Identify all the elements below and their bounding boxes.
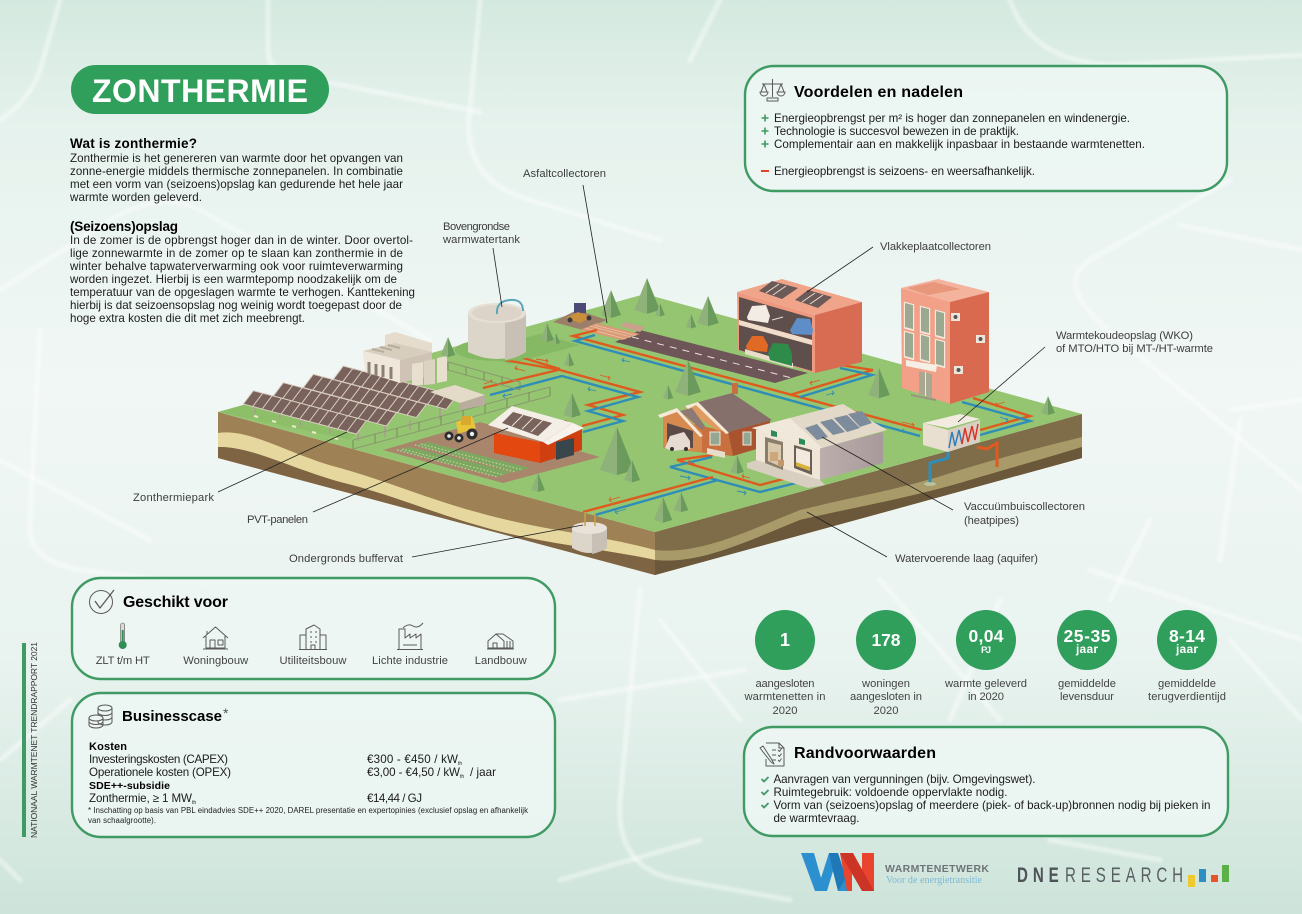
icon: thermometer (119, 623, 127, 649)
farm field (383, 422, 600, 483)
panel: randvoorwaarden: Vorm van (seizoens)opslag of meerdere (piek- of back-up)bronnen nodig bij pieken in (774, 799, 1210, 812)
icon: factory (397, 623, 423, 650)
stat: levensduur: 25-35 (1064, 626, 1111, 646)
panel: geschikt voor: ZLT t/m HT (96, 655, 150, 667)
panel: businesscase: * (223, 705, 229, 721)
diagram labels: Bovengrondse (443, 221, 510, 233)
platform side faces (218, 412, 1082, 575)
barn with PVT panels (488, 406, 584, 463)
stat: warmtenetten: warmtenetten in (744, 691, 826, 703)
panel: businesscase: / jaar (470, 766, 496, 779)
panel: businesscase: Operationele kosten (OPEX) (89, 766, 231, 779)
panel: geschikt voor: Landbouw (475, 655, 528, 667)
stat: levensduur: gemiddelde (1058, 678, 1116, 690)
house (658, 383, 772, 458)
text block: wat is zonthermie: warmte worden geleverd. (69, 191, 202, 204)
stat: warmte geleverd: warmte geleverd (944, 678, 1027, 690)
warm water tank (455, 300, 539, 361)
stat: terugverdientijd (1148, 610, 1226, 703)
callout lines (218, 185, 1045, 557)
diagram labels: Watervoerende laag (aquifer) (895, 553, 1038, 565)
panel: businesscase: SDE++-subsidie (89, 780, 170, 792)
panel: businesscase: Investeringskosten (CAPEX) (89, 753, 228, 766)
warehouse with vacuum tube collectors (747, 404, 887, 488)
panel: businesscase: th (192, 800, 196, 806)
text block: wat is zonthermie: zonne-energie middels thermische zonnepanelen. In combinatie (70, 165, 403, 178)
diagram labels: Zonthermiepark (133, 492, 214, 504)
panel: geschikt voor: Utiliteitsbouw (280, 655, 347, 667)
panel: randvoorwaarden: Randvoorwaarden (794, 745, 936, 762)
text block: seizoensopslag: temperatuur van de opgeslagen warmte te verhogen. Kanttekening (70, 286, 415, 299)
panel: voordelen en nadelen: Energieopbrengst per m² is hoger dan zonnepanelen en windenergie. (774, 112, 1130, 125)
text block: wat is zonthermie: Wat is zonthermie? (70, 136, 197, 151)
logo: warmtenetwerk (801, 853, 989, 891)
icon: checklist (760, 743, 784, 766)
solar field (zonthermiepark) (243, 366, 456, 441)
stat: warmtenetten (744, 610, 826, 717)
stat: warmte geleverd: PJ (981, 645, 991, 656)
logo: dne research (1017, 862, 1229, 887)
stat: terugverdientijd: gemiddelde (1158, 678, 1216, 690)
panel: geschikt voor: Geschikt voor (123, 594, 228, 611)
factory building (363, 332, 485, 410)
stat: terugverdientijd: 8-14 (1169, 626, 1205, 646)
diagram labels: warmwatertank (442, 234, 520, 246)
stat: woningen: 2020 (874, 705, 898, 717)
asphalt machine (566, 303, 592, 323)
text block: seizoensopslag: hoge extra kosten die dit met zich meebrengt. (70, 312, 305, 325)
underground buffer tank (572, 512, 607, 554)
stat: terugverdientijd: jaar (1175, 642, 1198, 656)
panel: businesscase: * Inschatting op basis van PBL eindadvies SDE++ 2020, DAREL presentatie en expertopinies (exclusief opslag en afhankelijk (88, 806, 528, 815)
WKO unit with heat exchanger (923, 414, 980, 452)
panel: voordelen en nadelen (745, 66, 1227, 191)
panel: randvoorwaarden: Aanvragen van vergunningen (bijv. Omgevingswet). (774, 773, 1036, 786)
text block: seizoensopslag: hierbij is dat seizoensopslag nog weinig wordt toegepast door de (70, 299, 402, 312)
panel: randvoorwaarden: de warmtevraag. (774, 812, 860, 825)
diagram labels: (heatpipes) (964, 515, 1019, 527)
stat: woningen (850, 610, 922, 717)
panel: voordelen en nadelen: Energieopbrengst is seizoens- en weersafhankelijk. (774, 165, 1035, 178)
diagram labels: Warmtekoudeopslag (WKO) (1056, 330, 1193, 342)
logo: warmtenetwerk: WARMTENETWERK (885, 863, 989, 875)
panel: businesscase: th (460, 774, 464, 780)
diagram: isometric heat network (218, 278, 1082, 575)
panel: voordelen en nadelen: Complementair aan en makkelijk inpasbaar in bestaande warmtenetten. (774, 138, 1145, 151)
text block: seizoensopslag: lige zonnewarmte in de zomer op te slaan kan zonthermie in de (70, 247, 403, 260)
stat: warmtenetten: aangesloten (756, 678, 814, 690)
roads and patches (553, 310, 808, 383)
stat: woningen: aangesloten in (850, 691, 922, 703)
text block: wat is zonthermie: Zonthermie is het genereren van warmte door het opvangen van (70, 152, 403, 165)
text block: wat is zonthermie (69, 136, 403, 204)
diagram labels: PVT-panelen (247, 514, 308, 526)
fences (353, 362, 550, 449)
icon: office building (299, 625, 327, 650)
stat: woningen: woningen (861, 678, 910, 690)
panel: businesscase: €300 - €450 / kW (367, 753, 458, 766)
stat: warmte geleverd: in 2020 (968, 691, 1004, 703)
text block: seizoensopslag: (Seizoens)opslag (70, 219, 178, 234)
text block: seizoensopslag: winter behalve tapwaterverwarming ook voor ruimteverwarming (69, 260, 403, 273)
stat: warmtenetten: 2020 (772, 705, 798, 717)
panel: geschikt voor: Lichte industrie (372, 655, 448, 667)
diagram labels: Ondergronds buffervat (289, 553, 404, 565)
stat: levensduur: levensduur (1060, 691, 1114, 703)
pipes (483, 330, 1030, 515)
panel: businesscase: th (458, 761, 462, 767)
panel: randvoorwaarden: Ruimtegebruik: voldoende oppervlakte nodig. (774, 786, 1008, 799)
panel: geschikt voor: Woningbouw (183, 655, 249, 667)
logo: dne research: DNE (1017, 862, 1059, 887)
platform top (grass) (218, 294, 1082, 532)
tractor (444, 416, 478, 442)
diagram labels: Vaccuümbuiscollectoren (964, 501, 1085, 513)
panel: voordelen en nadelen: Technologie is succesvol bewezen in de praktijk. (774, 125, 1019, 138)
diagram labels: Vlakkeplaatcollectoren (880, 241, 991, 253)
logo: warmtenetwerk: Voor de energietransitie (886, 875, 983, 886)
trees (441, 278, 1055, 523)
diagram labels: of MTO/HTO bij MT-/HT-warmte (1056, 343, 1213, 355)
title (71, 65, 329, 114)
panel: voordelen en nadelen: Voordelen en nadelen (794, 84, 963, 101)
icon: coins (89, 705, 112, 728)
panel: businesscase: €14,44 / GJ (367, 792, 422, 805)
side label: national report (22, 642, 39, 838)
icon: check circle (90, 590, 114, 614)
panel: businesscase: van schaalgrootte). (88, 816, 156, 825)
side label: national report: NATIONAAL WARMTENET TRENDRAPPORT 2021 (29, 642, 39, 838)
panel: businesscase: Kosten (89, 741, 127, 753)
title: ZONTHERMIE (92, 73, 308, 109)
logo: dne research: RESEARCH (1065, 862, 1183, 887)
diagram labels (133, 168, 1213, 565)
stat: warmte geleverd: 0,04 (968, 626, 1004, 646)
stat: terugverdientijd: terugverdientijd (1148, 691, 1226, 703)
stat: levensduur (1057, 610, 1117, 703)
stat: woningen: 178 (872, 630, 901, 650)
panel: businesscase: €3,00 - €4,50 / kW (367, 766, 460, 779)
text block: seizoensopslag: In de zomer is de opbrengst hoger dan in de winter. Door overtol- (70, 234, 413, 247)
stat: warmtenetten: 1 (780, 630, 790, 650)
stat: levensduur: jaar (1075, 642, 1098, 656)
text block: seizoensopslag (69, 219, 415, 325)
text block: seizoensopslag: worden ingezet. Hierbij is een warmtepomp noodzakelijk om de (69, 273, 397, 286)
panel: randvoorwaarden (744, 727, 1228, 836)
panel: businesscase (72, 693, 555, 837)
panel: businesscase: Zonthermie, ≥ 1 MW (89, 792, 192, 805)
icon: greenhouse (487, 634, 514, 649)
apartment tower (901, 279, 989, 404)
parking building with flat plate collectors (737, 279, 862, 373)
panel: businesscase: Businesscase (122, 708, 222, 725)
panel: geschikt voor (72, 578, 555, 679)
icon: house (203, 627, 228, 649)
text block: wat is zonthermie: met een vorm van (seizoens)opslag kan gedurende het hele jaar (70, 178, 403, 191)
diagram labels: Asfaltcollectoren (523, 168, 606, 180)
stat: warmte geleverd (944, 610, 1027, 703)
icon: scales (760, 79, 785, 101)
